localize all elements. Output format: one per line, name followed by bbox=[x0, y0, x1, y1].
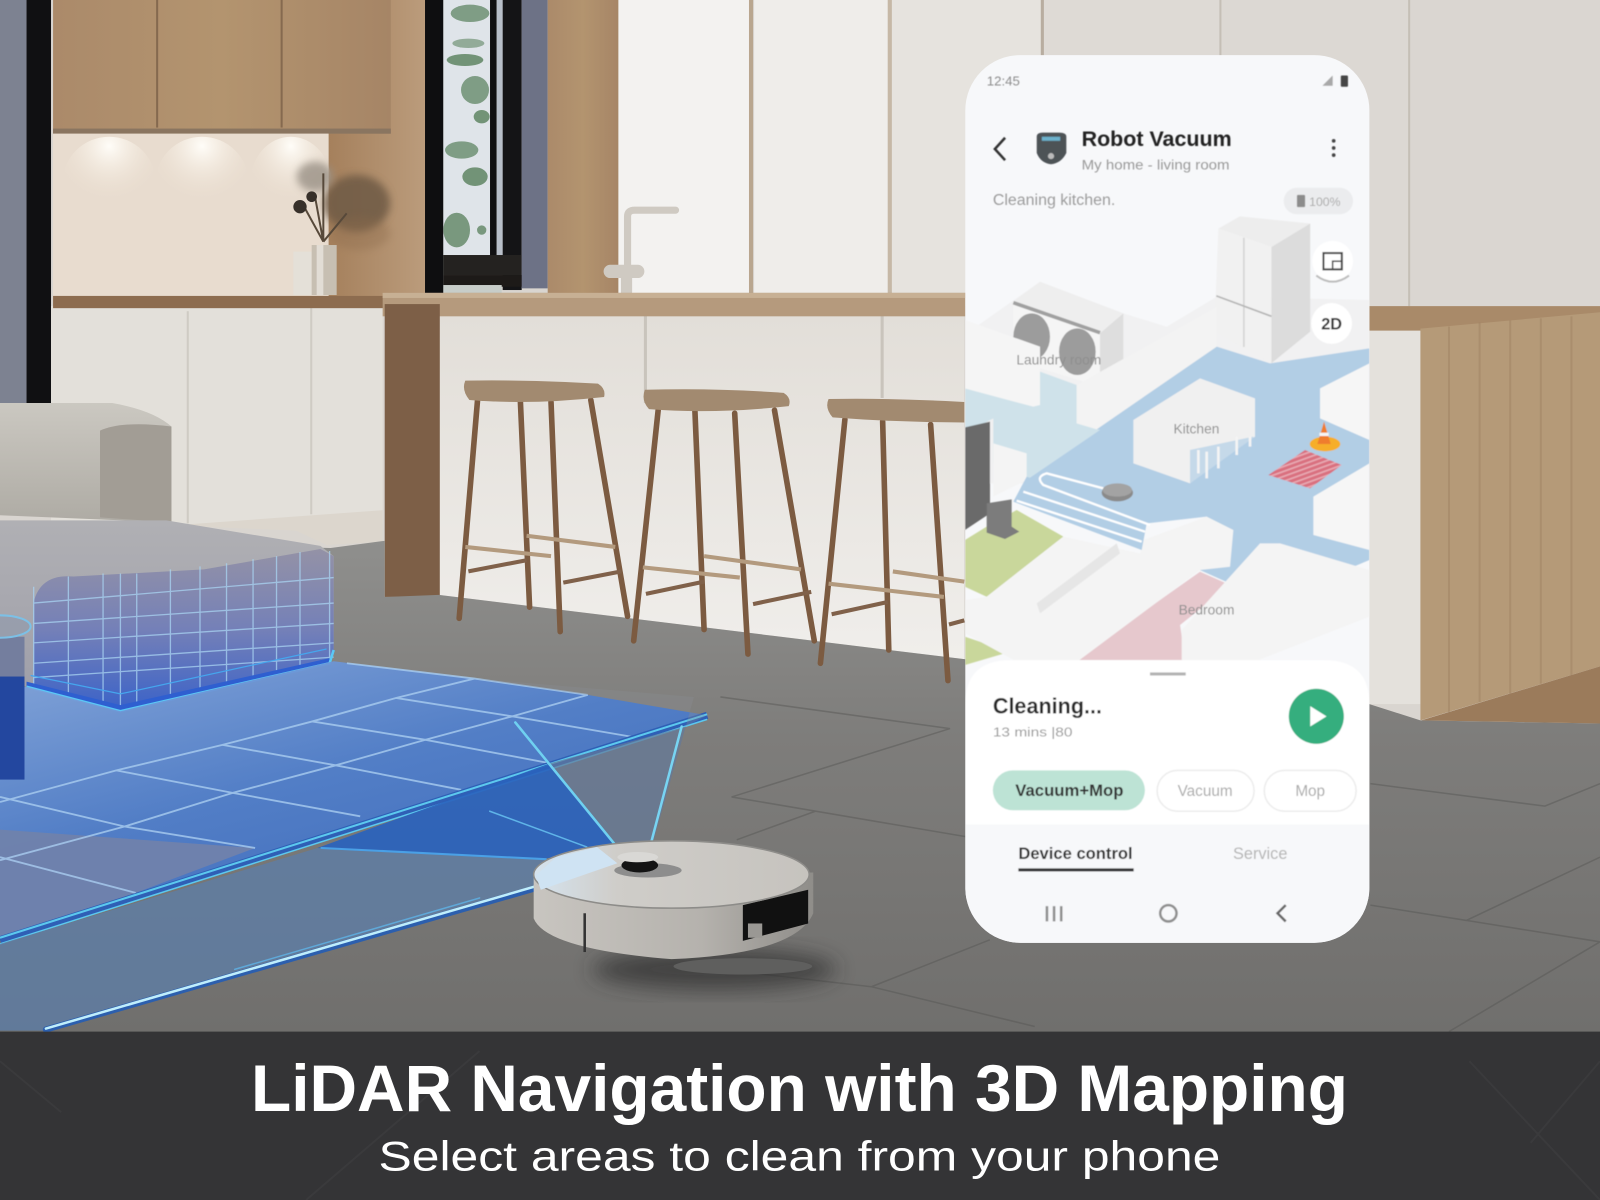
wood wall panel bbox=[329, 0, 426, 297]
caption bar bbox=[0, 1032, 1600, 1200]
base cabinets bbox=[51, 296, 385, 545]
no-go zone bbox=[1268, 450, 1342, 488]
phone mockup bbox=[965, 55, 1369, 943]
white room blocks bbox=[981, 337, 1370, 660]
rear window bbox=[743, 890, 808, 941]
map labels: Bedroom bbox=[1179, 602, 1234, 617]
wireframe grid bbox=[34, 551, 334, 711]
coffee table bbox=[0, 615, 31, 780]
blue beam on robot bbox=[536, 847, 617, 890]
laundry machines bbox=[1012, 300, 1124, 376]
stool 3 bbox=[820, 399, 964, 681]
blue grid mat bbox=[0, 661, 707, 940]
2D button: 2D bbox=[1321, 316, 1342, 334]
mop pad bbox=[673, 958, 812, 974]
sofa front face bbox=[27, 549, 334, 711]
robot shadow bbox=[592, 949, 837, 990]
navigation bar bbox=[1047, 905, 1286, 921]
layers button bbox=[1316, 252, 1350, 283]
lower map floors bbox=[965, 347, 1369, 665]
phone interior bbox=[965, 74, 1369, 943]
sofa base glow bbox=[27, 649, 334, 711]
service tab: Service bbox=[1233, 845, 1287, 863]
robot icon bbox=[1037, 133, 1066, 164]
refrigerator bbox=[1214, 216, 1310, 363]
battery pill: 100% bbox=[1309, 195, 1341, 209]
bottom control panel bbox=[965, 660, 1369, 943]
mode pill mop bbox=[1264, 770, 1356, 811]
mode pill vacuum: Vacuum bbox=[1178, 783, 1233, 800]
window with leaves bbox=[425, 0, 618, 295]
battery pill bbox=[1284, 188, 1353, 214]
status bar: 12:45 bbox=[987, 74, 1020, 89]
more menu bbox=[1332, 139, 1336, 157]
play button bbox=[1289, 689, 1344, 744]
mat grid lines bbox=[0, 663, 632, 893]
back chevron bbox=[995, 138, 1005, 160]
map labels bbox=[1016, 352, 1234, 617]
island counter bbox=[383, 293, 965, 659]
map labels: Laundry room bbox=[1016, 352, 1101, 367]
3D map bbox=[965, 216, 1369, 665]
vase with dried flowers bbox=[293, 162, 390, 295]
robot vacuum bbox=[534, 841, 837, 990]
main title: LiDAR Navigation with 3D Mapping bbox=[251, 1052, 1348, 1126]
cleaning path bbox=[1013, 473, 1150, 550]
mode pill selected: Vacuum+Mop bbox=[1015, 782, 1123, 800]
subtitle: Select areas to clean from your phone bbox=[379, 1132, 1220, 1179]
status bar bbox=[987, 74, 1348, 89]
bar stools bbox=[459, 380, 964, 681]
sofa with wireframe overlay bbox=[0, 403, 334, 711]
phone title: Robot Vacuum bbox=[1082, 127, 1232, 151]
upper scan beam bbox=[550, 727, 686, 850]
stool 1 bbox=[459, 380, 628, 632]
mode pill mop: Mop bbox=[1295, 783, 1325, 800]
cleaning status: Cleaning... bbox=[993, 693, 1102, 718]
tiled floor bbox=[0, 541, 1600, 1032]
LiDAR dome bbox=[614, 852, 682, 878]
mode pill selected bbox=[993, 770, 1145, 810]
left slate wall and black column bbox=[0, 0, 51, 403]
upper wood cabinets bbox=[53, 0, 391, 134]
TV and dock bbox=[965, 422, 1019, 539]
traffic cone bbox=[1310, 422, 1340, 451]
mode pill vacuum bbox=[1157, 770, 1254, 811]
mini robot on map bbox=[1102, 483, 1133, 501]
robot top disc bbox=[534, 841, 809, 908]
sofa back bbox=[0, 403, 171, 522]
time and area: 13 mins |80 bbox=[993, 725, 1072, 740]
laser beams bbox=[46, 722, 682, 1030]
right side counter and wood panel bbox=[1369, 306, 1600, 720]
robot body bbox=[534, 872, 813, 959]
kitchen island block bbox=[1133, 378, 1255, 483]
mat front edge bbox=[0, 714, 707, 944]
sofa seat bbox=[0, 520, 334, 711]
upper map floor bbox=[988, 304, 1366, 484]
phone subtitle: My home - living room bbox=[1082, 157, 1230, 172]
floor scan plane bbox=[0, 848, 612, 1031]
tall wall cabinets bbox=[617, 0, 1600, 306]
faucet bbox=[610, 210, 676, 292]
map labels: Kitchen bbox=[1173, 422, 1219, 437]
gray textured mat corner bbox=[0, 830, 255, 940]
stool 2 bbox=[634, 389, 814, 654]
2D button bbox=[1311, 303, 1352, 344]
device control tab: Device control bbox=[1018, 845, 1133, 863]
device control tab bbox=[1018, 845, 1134, 871]
status text: Cleaning kitchen. bbox=[993, 192, 1115, 209]
backsplash with lights bbox=[53, 134, 332, 297]
LiDAR floor mapping overlay bbox=[0, 661, 707, 1031]
